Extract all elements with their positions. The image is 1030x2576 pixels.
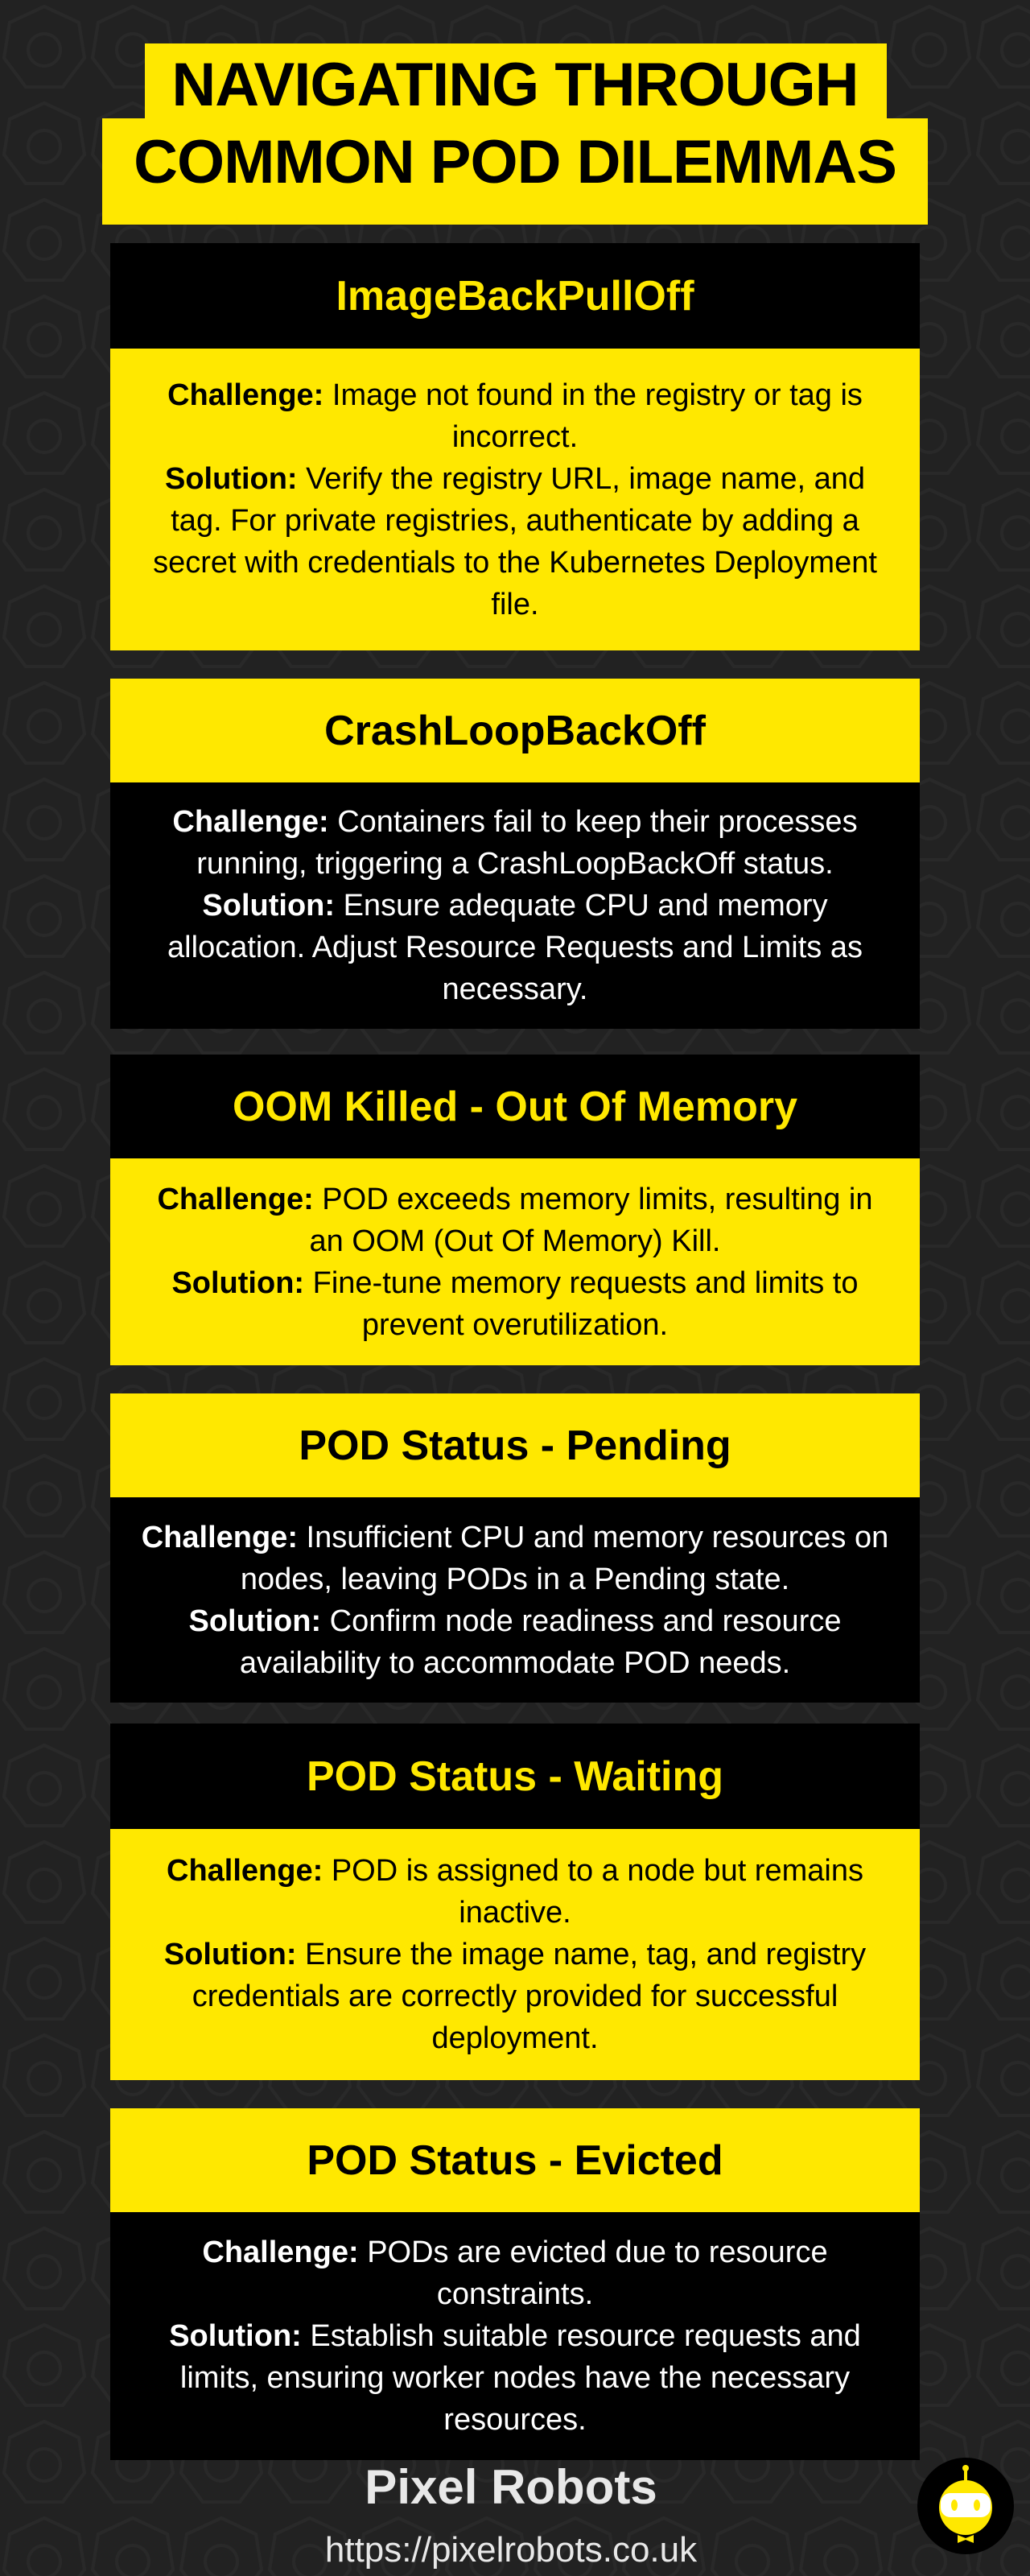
panel 6 header: POD Status - Evicted [307, 2136, 723, 2183]
panel 2 body: Solution: Ensure adequate CPU and memory allocation. Adjust Resource Requests and Limits as necessary. [167, 889, 863, 1006]
panel 4 header: POD Status - Pending [299, 1422, 731, 1468]
panel 3 body: Challenge: POD exceeds memory limits, resulting in an OOM (Out Of Memory) Kill. [157, 1182, 872, 1257]
panel 2 body [110, 782, 920, 1029]
panel 2 header: CrashLoopBackOff [324, 707, 706, 753]
panel 3 header: OOM Killed - Out Of Memory [233, 1084, 797, 1130]
footer url: https://pixelrobots.co.uk [325, 2530, 697, 2570]
panel 1 body [110, 349, 920, 650]
panel 6 header [110, 2108, 920, 2212]
panel 6 body: Challenge: PODs are evicted due to resource constraints. [202, 2235, 828, 2311]
panel 1 header: ImageBackPullOff [336, 272, 694, 319]
panel 1 header [110, 243, 920, 349]
footer brand: Pixel Robots [365, 2460, 657, 2514]
panel 5 header: POD Status - Waiting [307, 1753, 723, 1800]
panel 5 body: Challenge: POD is assigned to a node but remains inactive. [167, 1854, 863, 1930]
panel 4 header [110, 1393, 920, 1497]
panel 2 body: Challenge: Containers fail to keep their processes running, triggering a CrashLoopBackOff status. [172, 805, 858, 881]
title background [145, 43, 887, 120]
icon: robot logo [917, 2458, 1014, 2554]
panel 6 body: Solution: Establish suitable resource requests and limits, ensuring worker nodes have the necessary resources. [169, 2319, 861, 2437]
panel 2 header [110, 679, 920, 782]
panel 3 header [110, 1055, 920, 1158]
panel 5 body [110, 1829, 920, 2080]
panel 4 body: Challenge: Insufficient CPU and memory resources on nodes, leaving PODs in a Pending state. [142, 1520, 888, 1596]
title: NAVIGATING THROUGH [171, 51, 859, 119]
panel 3 body [110, 1158, 920, 1365]
panel 5 header [110, 1724, 920, 1829]
panel 3 body: Solution: Fine-tune memory requests and limits to prevent overutilization. [171, 1265, 859, 1341]
panel 5 body: Solution: Ensure the image name, tag, and registry credentials are correctly provided for successful deployment. [164, 1938, 866, 2055]
panel 1 body: Solution: Verify the registry URL, image name, and tag. For private registries, authenticate by adding a secret with credentials to the Kubernetes Deployment file. [153, 462, 877, 621]
title [134, 51, 896, 196]
panel 4 body: Solution: Confirm node readiness and resource availability to accommodate POD needs. [188, 1604, 841, 1679]
panel 4 body [110, 1497, 920, 1703]
title: COMMON POD DILEMMAS [134, 128, 896, 196]
panel 1 body: Challenge: Image not found in the registry or tag is incorrect. [167, 378, 863, 454]
panel 6 body [110, 2212, 920, 2460]
